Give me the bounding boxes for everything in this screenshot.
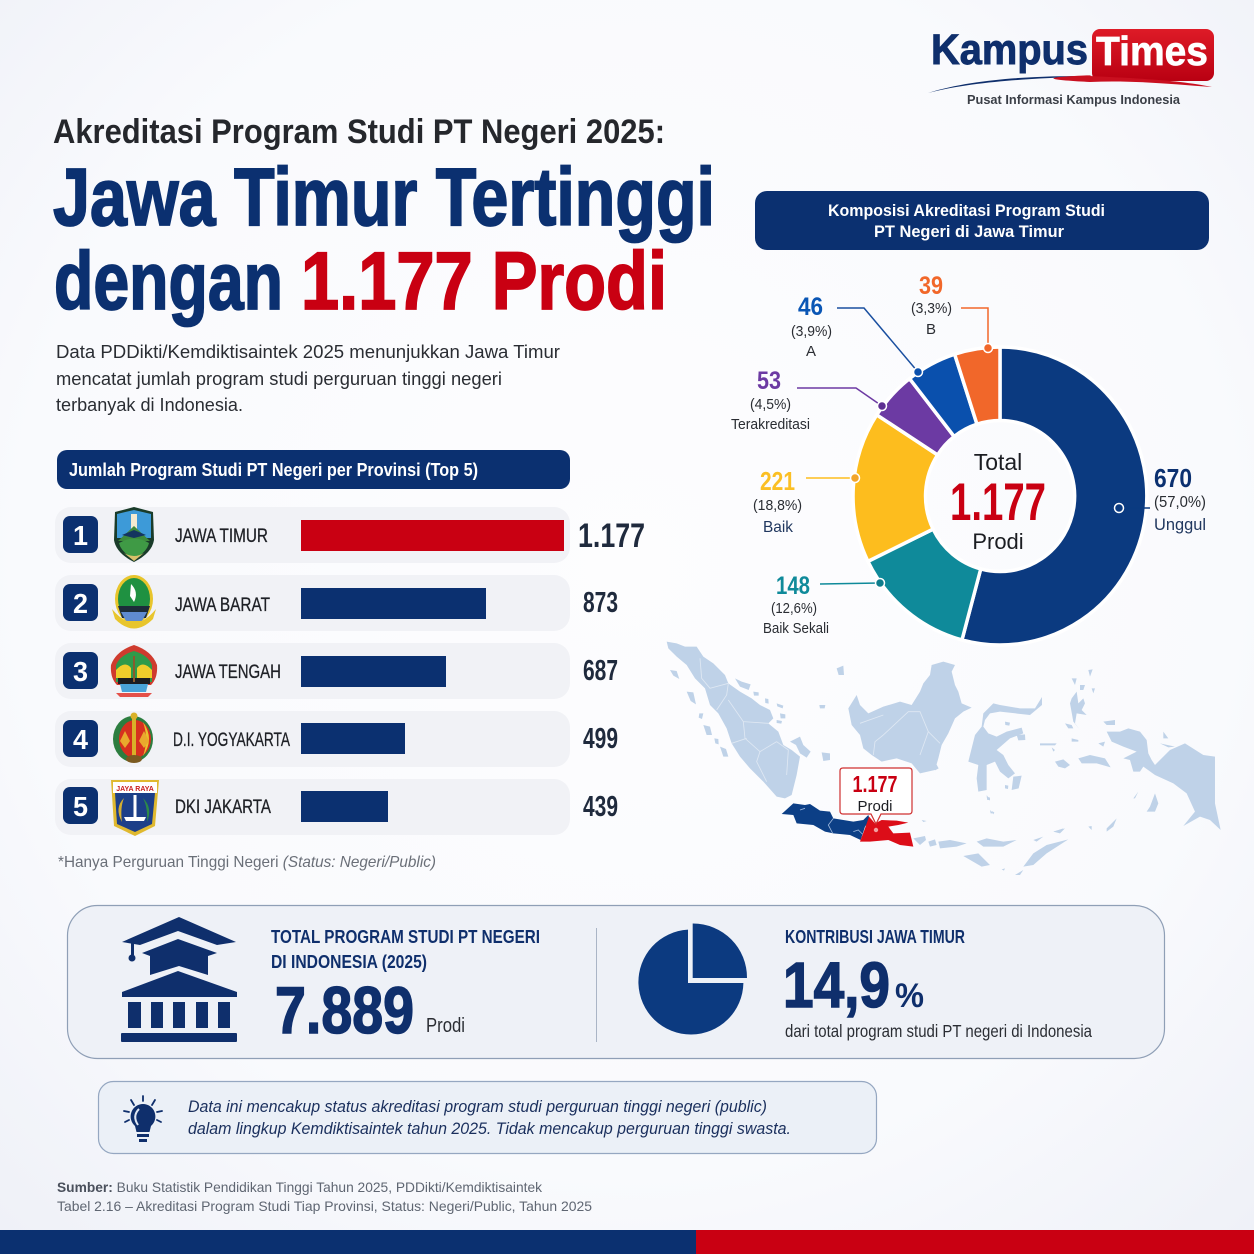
source note [57,1179,592,1214]
stat: kontribusi Jawa Timur: 14,9 [783,949,890,1021]
map: Maluku and Papua [1040,660,1221,832]
logo: KampusTimes: Pusat Informasi Kampus Indonesia [967,92,1181,107]
row: Jawa Barat: JAWA BARAT [175,595,270,616]
donut label: Baik Sekali: 148 [776,572,810,600]
logo: KampusTimes: Kampus [931,26,1088,74]
row: Jawa Barat: 2 [73,588,88,619]
bar chart heading: Jumlah Program Studi PT Negeri per Provinsi (Top 5) [69,460,478,480]
callout: 1.177 Prodi [840,768,912,832]
donut center total: Prodi [972,529,1024,554]
icon: university with graduation cap [121,917,237,1042]
stat: total program studi: DI INDONESIA (2025) [271,952,427,972]
donut label: B: (3,3%) [911,300,952,317]
row: Jawa Barat: 873 [583,587,618,619]
row: Jawa Tengah [55,643,618,699]
donut label: A [791,293,922,376]
donut label: B: 39 [919,272,943,300]
row: D.I. Yogyakarta: 4 [73,724,88,755]
stat: total program studi: TOTAL PROGRAM STUDI PT NEGERI [271,927,540,947]
icon: pie chart [638,923,747,1035]
callout: 1.177 Prodi: 1.177 [852,771,898,797]
footer bar [0,1230,1254,1254]
donut label: Unggul: Unggul [1154,515,1206,534]
row: Jawa Timur: 1.177 [578,517,645,555]
icon: light bulb [124,1096,162,1142]
intro paragraph: Data PDDikti/Kemdiktisaintek 2025 menunjukkan Jawa Timur [56,341,560,362]
main title: Jawa Timur Tertinggi [53,152,715,243]
panel: provinsi top 5 [55,450,645,836]
icon: lambang Jawa Tengah [111,645,157,697]
donut label: B [911,272,992,352]
row: Jawa Barat [55,575,618,631]
donut label: A: A [806,343,816,360]
donut label: Baik Sekali [763,572,884,637]
row: Jawa Timur [55,507,645,563]
map: Kalimantan and Sulawesi [848,662,1042,814]
subtitle heading: Akreditasi Program Studi PT Negeri 2025: [53,113,665,151]
icon: lambang DKI Jakarta [111,780,159,836]
row: DKI Jakarta: DKI JAKARTA [175,797,271,818]
intro paragraph: mencatat jumlah program studi perguruan tinggi negeri [56,368,502,389]
callout: catatan data [98,1082,876,1154]
donut center total: Total [974,449,1022,475]
donut heading: PT Negeri di Jawa Timur [874,222,1064,241]
donut chart [853,347,1147,645]
icon: lambang Yogyakarta [113,712,153,763]
source note: Tabel 2.16 – Akreditasi Program Studi Tiap Provinsi, Status: Negeri/Public, Tahun 2025 [57,1198,592,1214]
callout: catatan data: Data ini mencakup status akreditasi program studi perguruan tinggi negeri (public) [188,1098,767,1116]
donut label: Unggul [1114,463,1206,534]
donut center total: 1.177 [950,473,1046,532]
row: D.I. Yogyakarta [55,711,618,767]
donut label: A: (3,9%) [791,323,832,340]
panel: total stats [68,906,1164,1058]
map: Sumatra [667,642,844,798]
row: Jawa Tengah: 687 [583,655,618,687]
main title: dengan [54,236,283,327]
icon: lambang DKI Jakarta: JAYA RAYA [116,786,154,793]
donut label: Terakreditasi: 53 [757,367,781,395]
row: DKI Jakarta: 439 [583,791,618,823]
stat: kontribusi Jawa Timur: dari total program studi PT negeri di Indonesia [785,1021,1092,1041]
row: D.I. Yogyakarta: D.I. YOGYAKARTA [173,730,290,751]
intro paragraph [56,341,560,415]
logo: KampusTimes [928,26,1214,107]
stat: total program studi: Prodi [426,1015,465,1037]
donut label: Unggul: 670 [1154,463,1192,493]
row: Jawa Tengah: 3 [73,656,88,687]
donut label: Unggul: (57,0%) [1154,494,1206,511]
main title: 1.177 Prodi [301,236,667,327]
icon: lambang Jawa Timur [114,507,154,562]
row: Jawa Timur: 1 [73,520,88,551]
stat: total program studi: 7.889 [275,973,414,1047]
logo: KampusTimes: Times [1096,28,1208,74]
icon: lambang Jawa Barat [112,575,156,628]
donut label: Baik Sekali: Baik Sekali [763,621,829,637]
donut label: Baik Sekali: (12,6%) [771,601,817,617]
source note: Sumber: Buku Statistik Pendidikan Tinggi Tahun 2025, PDDikti/Kemdiktisaintek [57,1179,543,1195]
stat: kontribusi Jawa Timur: KONTRIBUSI JAWA TIMUR [785,927,965,947]
row: DKI Jakarta: 5 [73,791,88,822]
stat: kontribusi Jawa Timur: % [895,977,924,1015]
map: Nusa Tenggara [913,795,1068,875]
donut label: Terakreditasi: Terakreditasi [731,417,810,433]
donut heading: Komposisi Akreditasi Program Studi [828,201,1105,220]
map: Java highlighted provinces [782,803,913,847]
donut label: Baik: (18,8%) [753,497,802,514]
row: D.I. Yogyakarta: 499 [583,723,618,755]
donut label: B: B [926,321,936,338]
main title [53,152,715,327]
row: Jawa Timur: JAWA TIMUR [175,526,268,547]
intro paragraph: terbanyak di Indonesia. [56,394,243,415]
donut label: Terakreditasi: (4,5%) [750,397,791,413]
donut label: A: 46 [798,293,823,321]
donut label: Baik [753,466,860,536]
donut heading [755,191,1209,250]
stat: kontribusi Jawa Timur [783,927,1092,1041]
donut label: Terakreditasi [731,367,886,433]
stat: total program studi [271,927,540,1047]
donut label: Baik: 221 [760,466,795,496]
row: DKI Jakarta [55,779,618,836]
donut center total [950,449,1046,554]
bar chart heading [57,450,570,489]
map: Indonesia [667,642,1221,875]
footnote: *Hanya Perguruan Tinggi Negeri (Status: Negeri/Public) [58,854,436,871]
callout: 1.177 Prodi: Prodi [857,798,893,815]
donut label: Baik: Baik [763,519,794,536]
row: Jawa Tengah: JAWA TENGAH [175,662,281,683]
callout: catatan data: dalam lingkup Kemdiktisaintek tahun 2025. Tidak mencakup perguruan tinggi swasta. [188,1120,791,1138]
